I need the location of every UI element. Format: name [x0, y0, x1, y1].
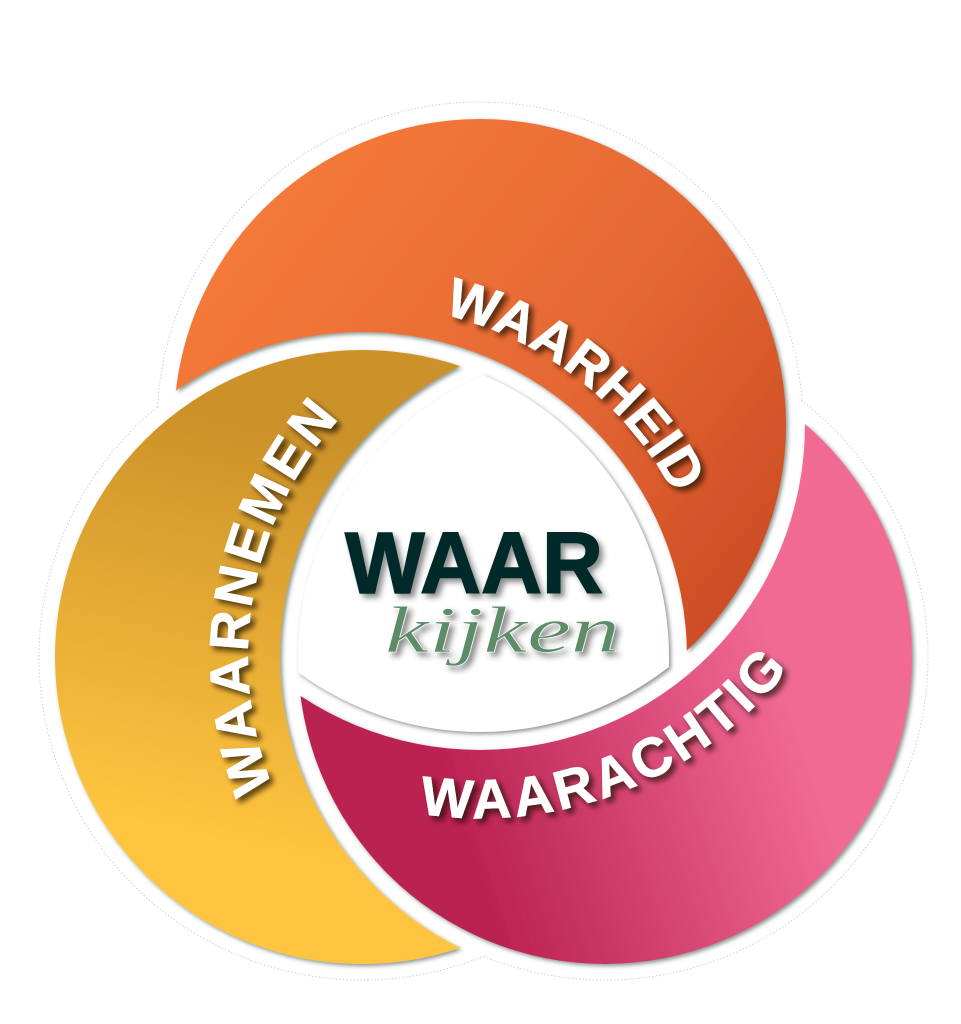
- panel: white centre: [298, 375, 669, 732]
- label: WAARNEMEN: WAARNEMEN: [210, 396, 344, 806]
- panel: yellow crescent: [54, 349, 463, 969]
- outer halo outline: [39, 102, 928, 980]
- subtitle: kijken: kijken: [385, 594, 620, 667]
- panel: pink crescent: [300, 424, 917, 969]
- panel: orange crescent: [176, 118, 791, 654]
- label: WAARHEID: WAARHEID: [452, 276, 708, 495]
- label: WAARACHTIG: WAARACHTIG: [422, 652, 790, 827]
- title: WAAR: WAAR: [345, 515, 603, 612]
